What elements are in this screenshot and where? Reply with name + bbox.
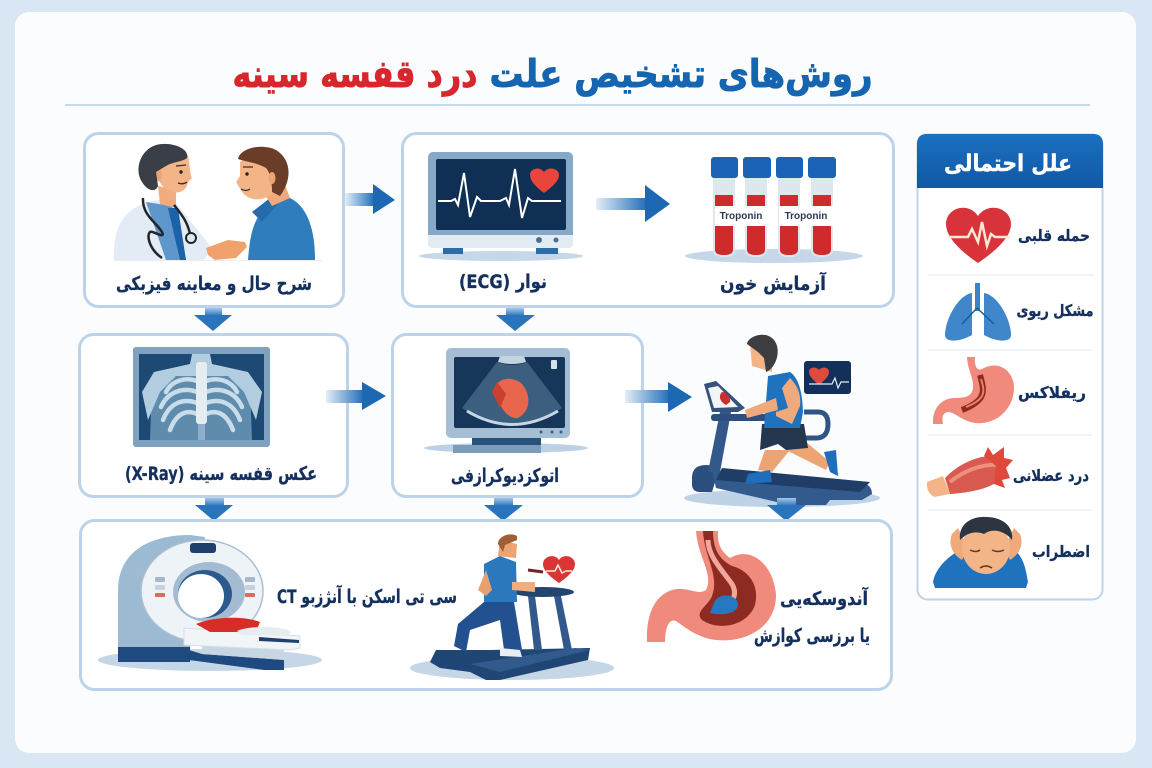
label: ECG: نوار (ECG) [459,271,547,293]
label: blood test: آزمایش خون [720,271,826,295]
arrow: echo to stress test [625,382,692,412]
icon: muscle [927,447,1013,497]
arrow: x-ray to echo [326,382,386,410]
panel: echocardiography [392,334,642,496]
panel: advanced tests [80,520,892,690]
label: اتوکزدیوکرازفی [451,465,559,487]
label: anxiety: اضطراب [1032,542,1090,561]
header [917,134,1103,188]
icon: echo monitor [424,348,588,453]
label: reflux: ریفلاکس [1018,383,1086,402]
label: عکس قفسه سینه (X-Ray) [125,463,317,485]
icon: troponin tubes [685,157,863,263]
arrow: x-ray down [195,498,233,521]
icon: lungs [945,283,1011,341]
label: endoscopy [754,586,870,647]
arrow: exam to ECG [345,184,395,214]
panel: ECG and blood test [402,134,894,306]
arrow: ECG to echo [496,308,535,331]
icon: heart [946,208,1011,263]
label: شرح حال و معاینه فیزبکی [116,273,312,295]
icon: treadmill patient [410,534,614,680]
label: lung problem: مشکل ریوی [1016,301,1094,320]
label: muscle pain: درد عضلانی [1013,466,1089,485]
title [232,52,872,97]
panel: possible causes [917,134,1103,600]
header text: علل احتمالی [944,151,1072,177]
arrow: exam to x-ray [194,308,232,331]
icon: doctor and patient [114,144,315,260]
title: درد قفسه سینه [232,52,478,96]
icon: heart rate card [804,361,851,394]
icon: troponin tubes: Troponin [720,211,762,222]
icon: treadmill runner [684,335,880,507]
icon: x-ray [133,347,270,447]
arrow: stress test down [767,498,806,521]
icon: stomach endoscopy [647,531,776,642]
label: CT: سی تی اسکن با آنژزبو CT [277,584,457,608]
arrow: echo down [484,498,523,521]
icon: troponin tubes: Troponin [785,211,827,222]
icon: stomach reflux [933,357,1014,424]
label: heart attack: حمله قلبی [1018,226,1090,245]
panel: chest x-ray [80,334,348,496]
arrow: ECG to blood test [596,185,670,222]
label: endoscopy: یا برزسی کوازش [754,625,870,647]
icon: CT scanner [98,535,322,671]
panel: history and physical exam [84,134,344,306]
icon: anxious person [933,517,1028,588]
label: endoscopy: آندوسکه‌یی [780,586,868,610]
icon: ECG monitor [419,152,583,261]
title: روش‌های تشخیص علت [490,52,872,97]
